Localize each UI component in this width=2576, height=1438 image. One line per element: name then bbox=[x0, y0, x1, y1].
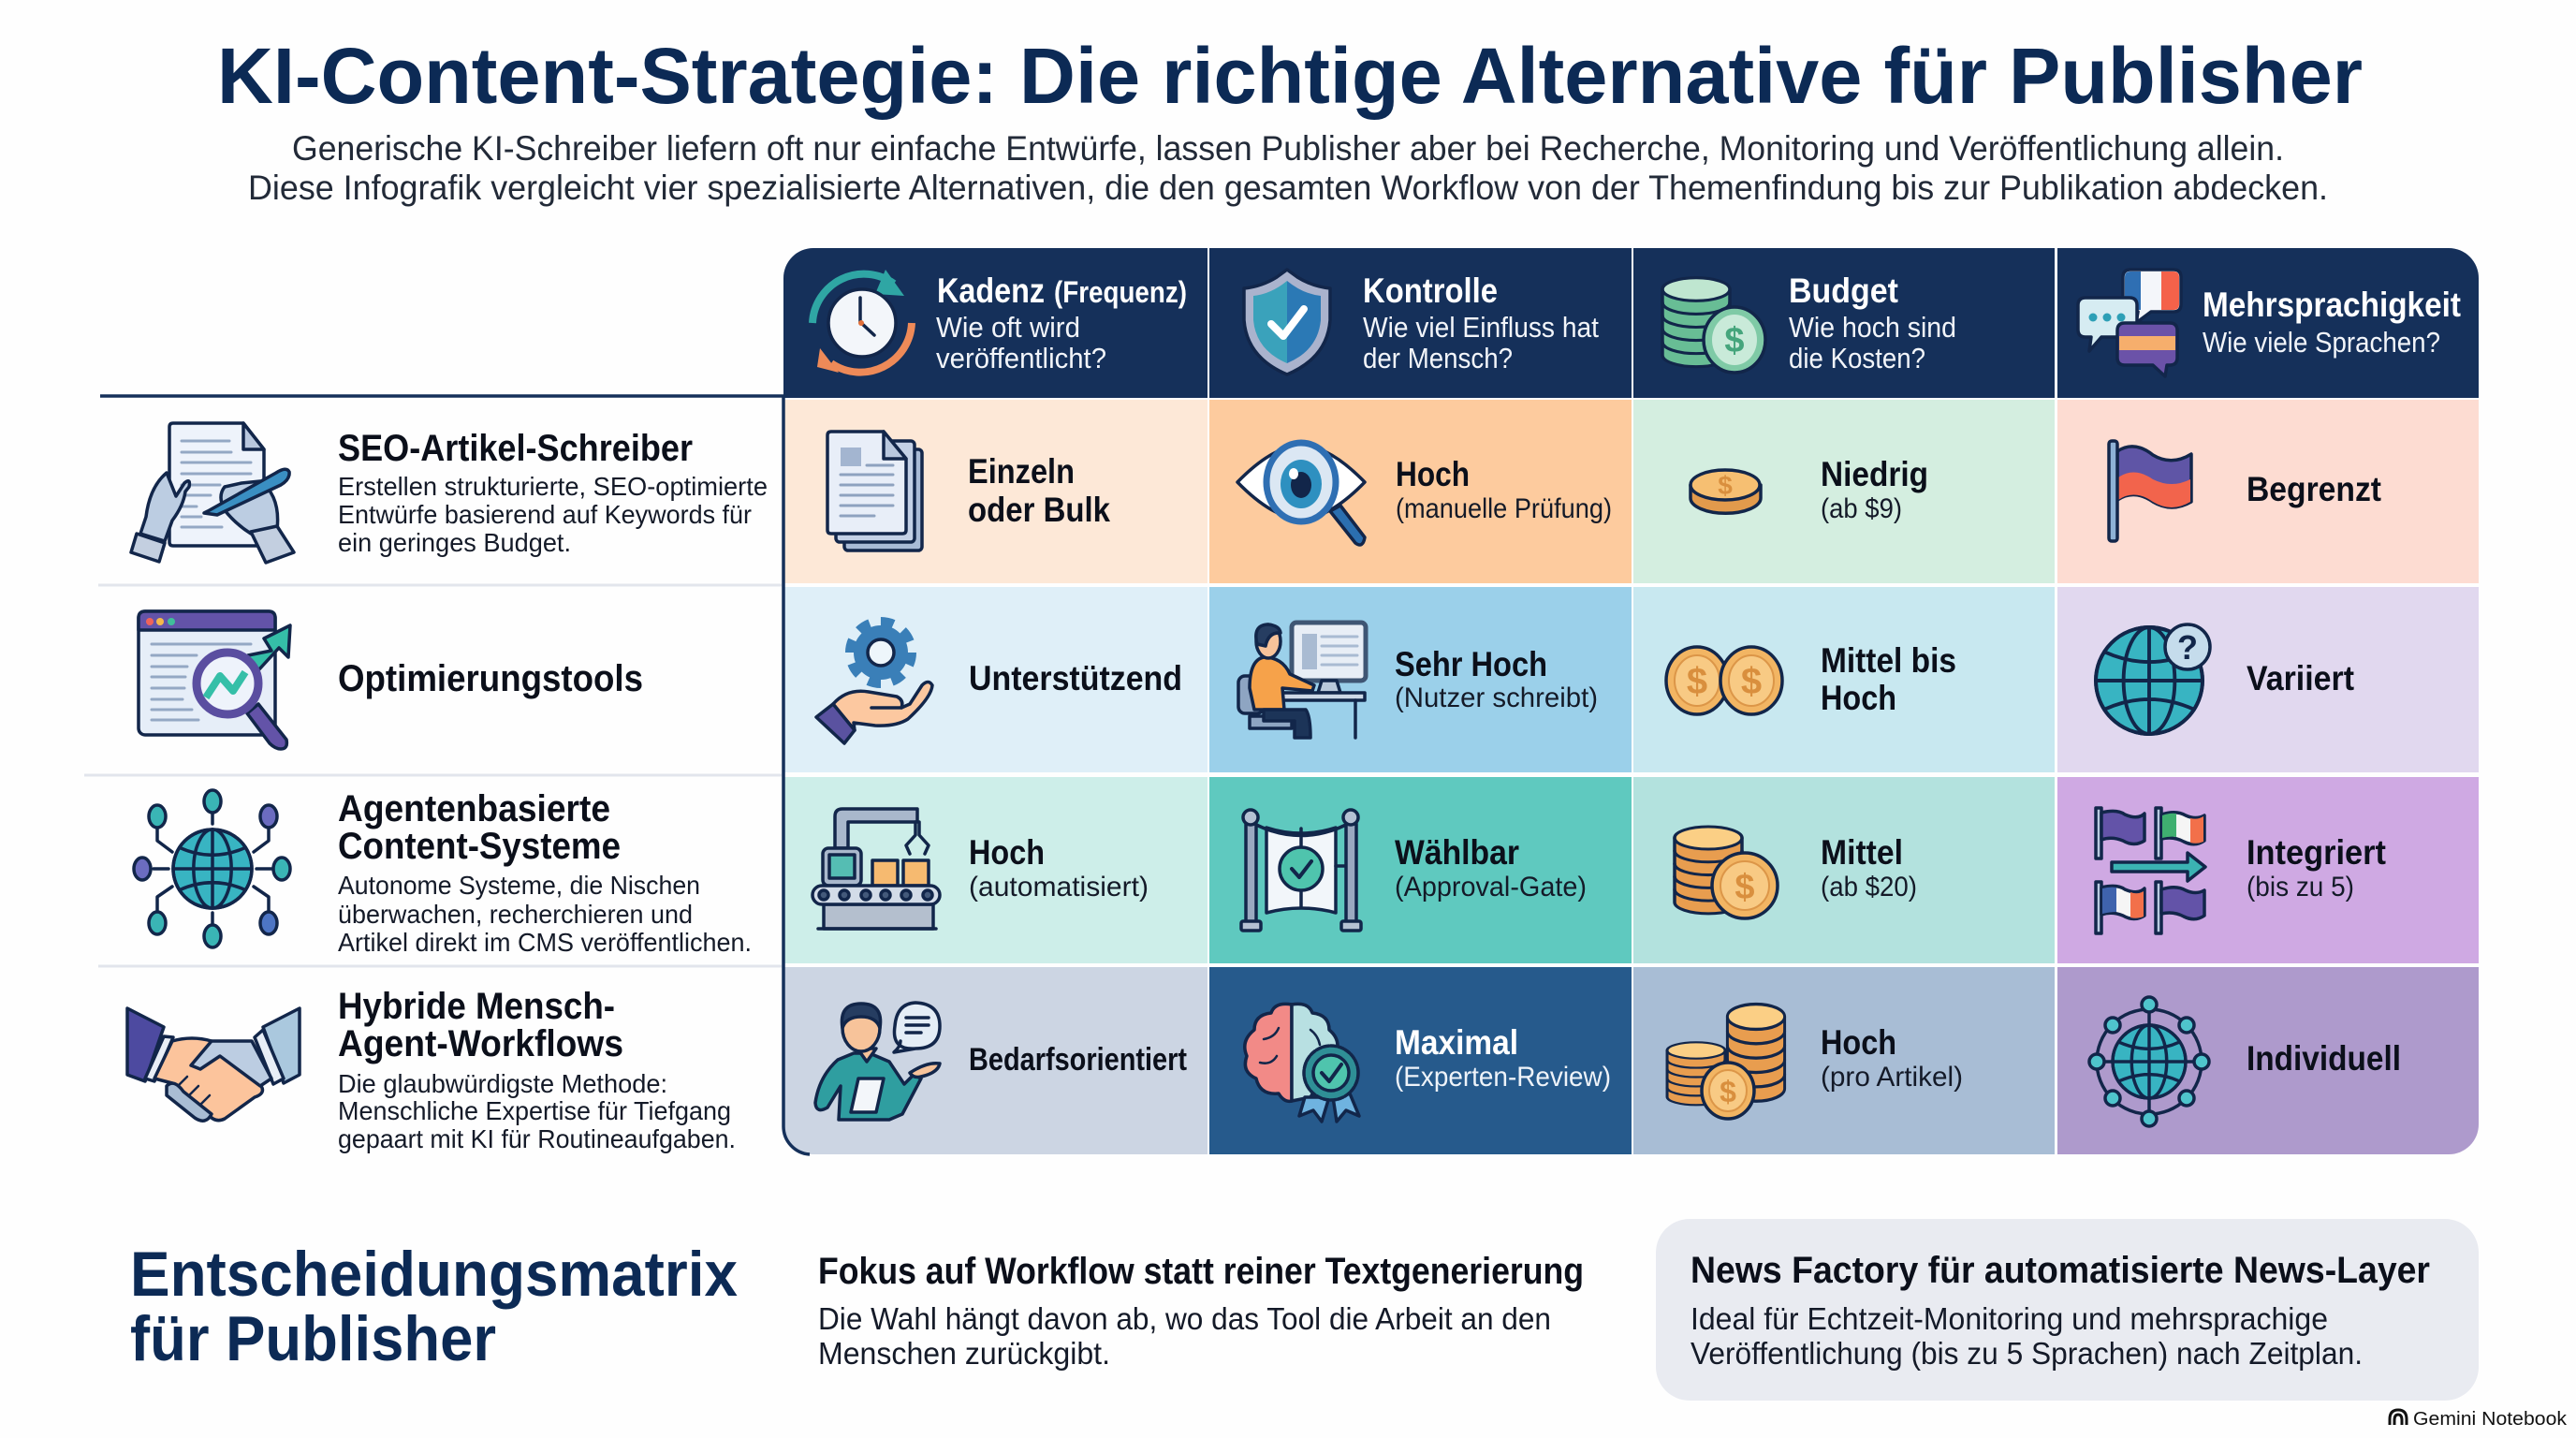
cell: Begrenzt bbox=[2109, 441, 2381, 541]
cell: Mittel bis Hoch: Hoch bbox=[1821, 679, 1896, 717]
row: Hybride Mensch-Agent-Workflows: gepaart mit KI für Routineaufgaben. bbox=[338, 1124, 736, 1153]
cell: Einzeln oder Bulk bbox=[827, 432, 1110, 550]
comparison matrix bbox=[783, 248, 2479, 1154]
footer block: workflow focus bbox=[818, 1251, 1584, 1371]
header: Budget: Wie hoch sind bbox=[1789, 311, 1956, 344]
row: SEO-Artikel-Schreiber: ein geringes Budget. bbox=[338, 528, 571, 557]
cell: Unterstützend: Unterstützend bbox=[969, 659, 1182, 697]
icon: human and robot handshake bbox=[127, 1008, 300, 1121]
footer heading: Entscheidungsmatrix: Entscheidungsmatrix bbox=[130, 1239, 738, 1310]
icon: globe with connected nodes bbox=[134, 790, 290, 947]
footer block: workflow focus: Menschen zurückgibt. bbox=[818, 1336, 1110, 1371]
title: KI-Content-Strategie: Die richtige Alternative für Publisher bbox=[217, 32, 2363, 120]
cell: Mittel bis Hoch bbox=[1666, 641, 1956, 717]
cell: Integriert: (bis zu 5) bbox=[2247, 872, 2354, 902]
cell: Sehr Hoch: Sehr Hoch bbox=[1395, 645, 1547, 683]
cell: Bedarfsorientiert bbox=[815, 1003, 1187, 1120]
subtitle bbox=[248, 129, 2328, 207]
cell: Hoch manuelle Prüfung: Hoch bbox=[1396, 455, 1470, 493]
subtitle: Diese Infografik vergleicht vier spezialisierte Alternativen, die den gesamten Workflow von der Themenfindung bis zur Publikation abdecken. bbox=[248, 169, 2328, 207]
header: Budget: die Kosten? bbox=[1789, 342, 1925, 374]
row: SEO-Artikel-Schreiber bbox=[131, 423, 768, 563]
icon: green coin stack: $ bbox=[1724, 321, 1745, 360]
icon: document stack bbox=[827, 432, 922, 550]
header: Kontrolle: Kontrolle bbox=[1363, 271, 1498, 310]
header: Mehrsprachigkeit: Mehrsprachigkeit bbox=[2203, 286, 2461, 324]
cell: Individuell bbox=[2089, 997, 2401, 1126]
callout: News Factory: News Factory für automatisierte News-Layer bbox=[1690, 1250, 2430, 1291]
row: SEO-Artikel-Schreiber: Erstellen strukturierte, SEO-optimierte bbox=[338, 472, 768, 501]
row dividers bbox=[84, 585, 782, 966]
header: Kontrolle: Wie viel Einfluss hat bbox=[1363, 311, 1599, 344]
callout: News Factory bbox=[1656, 1219, 2479, 1401]
header: Mehrsprachigkeit: Wie viele Sprachen? bbox=[2203, 326, 2440, 359]
icon: brain with badge bbox=[1245, 1004, 1359, 1122]
cell: Hoch pro Artikel: (pro Artikel) bbox=[1821, 1062, 1963, 1093]
cell: Maximal: (Experten-Review) bbox=[1395, 1062, 1611, 1093]
row: Optimierungstools bbox=[139, 611, 643, 749]
cell: Variiert bbox=[2096, 624, 2354, 734]
callout: News Factory: Veröffentlichung (bis zu 5 Sprachen) nach Zeitplan. bbox=[1690, 1336, 2363, 1371]
icon: clock with cycle arrows bbox=[812, 270, 912, 373]
cell: Integriert bbox=[2096, 808, 2386, 933]
cell: Integriert: Integriert bbox=[2247, 833, 2386, 872]
cell: Hoch automatisiert bbox=[812, 809, 1149, 929]
row: Agentenbasierte Content-Systeme: Agentenbasierte bbox=[338, 788, 610, 829]
icon: globe network bbox=[2089, 997, 2209, 1126]
row: SEO-Artikel-Schreiber: Entwürfe basierend auf Keywords für bbox=[338, 500, 752, 529]
matrix frame rules bbox=[100, 396, 810, 1154]
icon: eye with magnifier bbox=[1237, 443, 1365, 545]
row: Hybride Mensch-Agent-Workflows: Hybride Mensch- bbox=[338, 986, 615, 1027]
icon: hand holding gear bbox=[816, 624, 932, 743]
icon: two coins: $ bbox=[1687, 661, 1707, 702]
row: Agentenbasierte Content-Systeme bbox=[134, 788, 752, 957]
icon: person with speech bubble bbox=[815, 1003, 940, 1120]
cell: Niedrig bbox=[1690, 455, 1928, 524]
cell: Mittel ab $20 bbox=[1675, 827, 1917, 918]
row: SEO-Artikel-Schreiber: SEO-Artikel-Schreiber bbox=[338, 428, 693, 469]
header: Budget bbox=[1662, 271, 1956, 374]
cell: Mittel ab $20: Mittel bbox=[1821, 833, 1903, 872]
icon: flag bbox=[2109, 441, 2191, 541]
cell: Maximal bbox=[1245, 1004, 1611, 1122]
header: Kadenz: (Frequenz) bbox=[1054, 275, 1187, 309]
icon: browser with magnifier and rising arrow bbox=[139, 611, 290, 749]
matrix cell backgrounds bbox=[783, 248, 2479, 1154]
cell: Unterstützend bbox=[816, 624, 1182, 743]
header: Kontrolle: der Mensch? bbox=[1363, 342, 1513, 374]
icon: two coin stacks with coin bbox=[1667, 1005, 1785, 1119]
icon: green coin stack bbox=[1662, 278, 1765, 373]
icon: globe with question mark bbox=[2096, 624, 2210, 734]
cell: Hoch pro Artikel: Hoch bbox=[1821, 1023, 1896, 1062]
icon: shield with check bbox=[1244, 270, 1330, 374]
cell: Variiert: Variiert bbox=[2247, 659, 2354, 697]
subtitle: Generische KI-Schreiber liefern oft nur einfache Entwürfe, lassen Publisher aber bei Recherche, Monitoring und Veröffentlichung allein. bbox=[292, 129, 2284, 168]
icon: coin stack with coin: $ bbox=[1734, 868, 1755, 907]
cell: Individuell: Individuell bbox=[2247, 1039, 2401, 1078]
row: Agentenbasierte Content-Systeme: Artikel direkt im CMS veröffentlichen. bbox=[338, 928, 752, 957]
row: Hybride Mensch-Agent-Workflows bbox=[127, 986, 736, 1153]
cell: Bedarfsorientiert: Bedarfsorientiert bbox=[969, 1042, 1187, 1078]
header: Budget: Budget bbox=[1789, 271, 1898, 310]
cell: Mittel ab $20: (ab $20) bbox=[1821, 872, 1917, 902]
header: Kontrolle bbox=[1244, 270, 1599, 374]
icon: two coins: $ bbox=[1741, 661, 1762, 702]
icon: person at computer bbox=[1238, 623, 1366, 738]
cell: Hoch automatisiert: Hoch bbox=[969, 833, 1045, 872]
icon: robot hands writing on document bbox=[131, 423, 294, 563]
row: Hybride Mensch-Agent-Workflows: Menschliche Expertise für Tiefgang bbox=[338, 1096, 731, 1125]
footer block: workflow focus: Fokus auf Workflow statt reiner Textgenerierung bbox=[818, 1251, 1584, 1292]
cell: Hoch manuelle Prüfung: (manuelle Prüfung) bbox=[1396, 493, 1612, 524]
cell: Wählbar: Wählbar bbox=[1395, 833, 1519, 872]
cell: Sehr Hoch bbox=[1238, 623, 1598, 738]
cell: Mittel bis Hoch: Mittel bis bbox=[1821, 641, 1956, 680]
cell: Sehr Hoch: (Nutzer schreibt) bbox=[1395, 682, 1598, 713]
row: Hybride Mensch-Agent-Workflows: Agent-Workflows bbox=[338, 1023, 623, 1064]
cell: Hoch pro Artikel bbox=[1667, 1005, 1963, 1119]
header: Mehrsprachigkeit bbox=[2078, 270, 2461, 376]
header: Kadenz: Wie oft wird bbox=[936, 311, 1080, 344]
cell: Einzeln oder Bulk: Einzeln bbox=[968, 452, 1075, 491]
row: Optimierungstools: Optimierungstools bbox=[338, 658, 643, 699]
header: Kadenz: Kadenz bbox=[937, 271, 1045, 310]
cell: Wählbar: (Approval-Gate) bbox=[1395, 872, 1587, 902]
row: Agentenbasierte Content-Systeme: überwachen, recherchieren und bbox=[338, 900, 693, 929]
cell: Begrenzt: Begrenzt bbox=[2247, 470, 2381, 508]
cell: Einzeln oder Bulk: oder Bulk bbox=[968, 491, 1110, 529]
icon: coin stack with coin bbox=[1675, 827, 1778, 918]
watermark: Gemini Notebook: Gemini Notebook bbox=[2413, 1409, 2568, 1430]
icon: flags with arrow bbox=[2096, 808, 2205, 933]
icon: single coin bbox=[1690, 470, 1761, 513]
icon: factory conveyor bbox=[812, 809, 940, 929]
row: Agentenbasierte Content-Systeme: Content-Systeme bbox=[338, 826, 621, 867]
header: Kadenz: veröffentlicht? bbox=[936, 342, 1106, 374]
footer heading: Entscheidungsmatrix: für Publisher bbox=[130, 1303, 496, 1374]
icon: two coins bbox=[1666, 647, 1782, 714]
icon: approval gate bbox=[1241, 810, 1361, 931]
cell: Niedrig: Niedrig bbox=[1821, 455, 1928, 493]
footer block: workflow focus: Die Wahl hängt davon ab, wo das Tool die Arbeit an den bbox=[818, 1301, 1551, 1336]
icon: single coin: $ bbox=[1718, 471, 1733, 500]
icon: two coin stacks with coin: $ bbox=[1720, 1075, 1736, 1108]
callout: News Factory: Ideal für Echtzeit-Monitoring und mehrsprachige bbox=[1690, 1301, 2328, 1336]
cell: Niedrig: (ab $9) bbox=[1821, 493, 1902, 524]
cell: Wählbar bbox=[1241, 810, 1587, 931]
cell: Hoch manuelle Prüfung bbox=[1237, 443, 1612, 545]
cell: Hoch automatisiert: (automatisiert) bbox=[969, 872, 1149, 902]
icon: globe with question mark: ? bbox=[2177, 628, 2198, 667]
row: Agentenbasierte Content-Systeme: Autonome Systeme, die Nischen bbox=[338, 871, 700, 900]
header: Kadenz bbox=[812, 270, 1187, 374]
footer heading: Entscheidungsmatrix bbox=[130, 1239, 738, 1374]
cell: Maximal: Maximal bbox=[1395, 1023, 1518, 1062]
icon: speech bubbles with flags bbox=[2078, 270, 2181, 376]
row: Hybride Mensch-Agent-Workflows: Die glaubwürdigste Methode: bbox=[338, 1069, 667, 1098]
